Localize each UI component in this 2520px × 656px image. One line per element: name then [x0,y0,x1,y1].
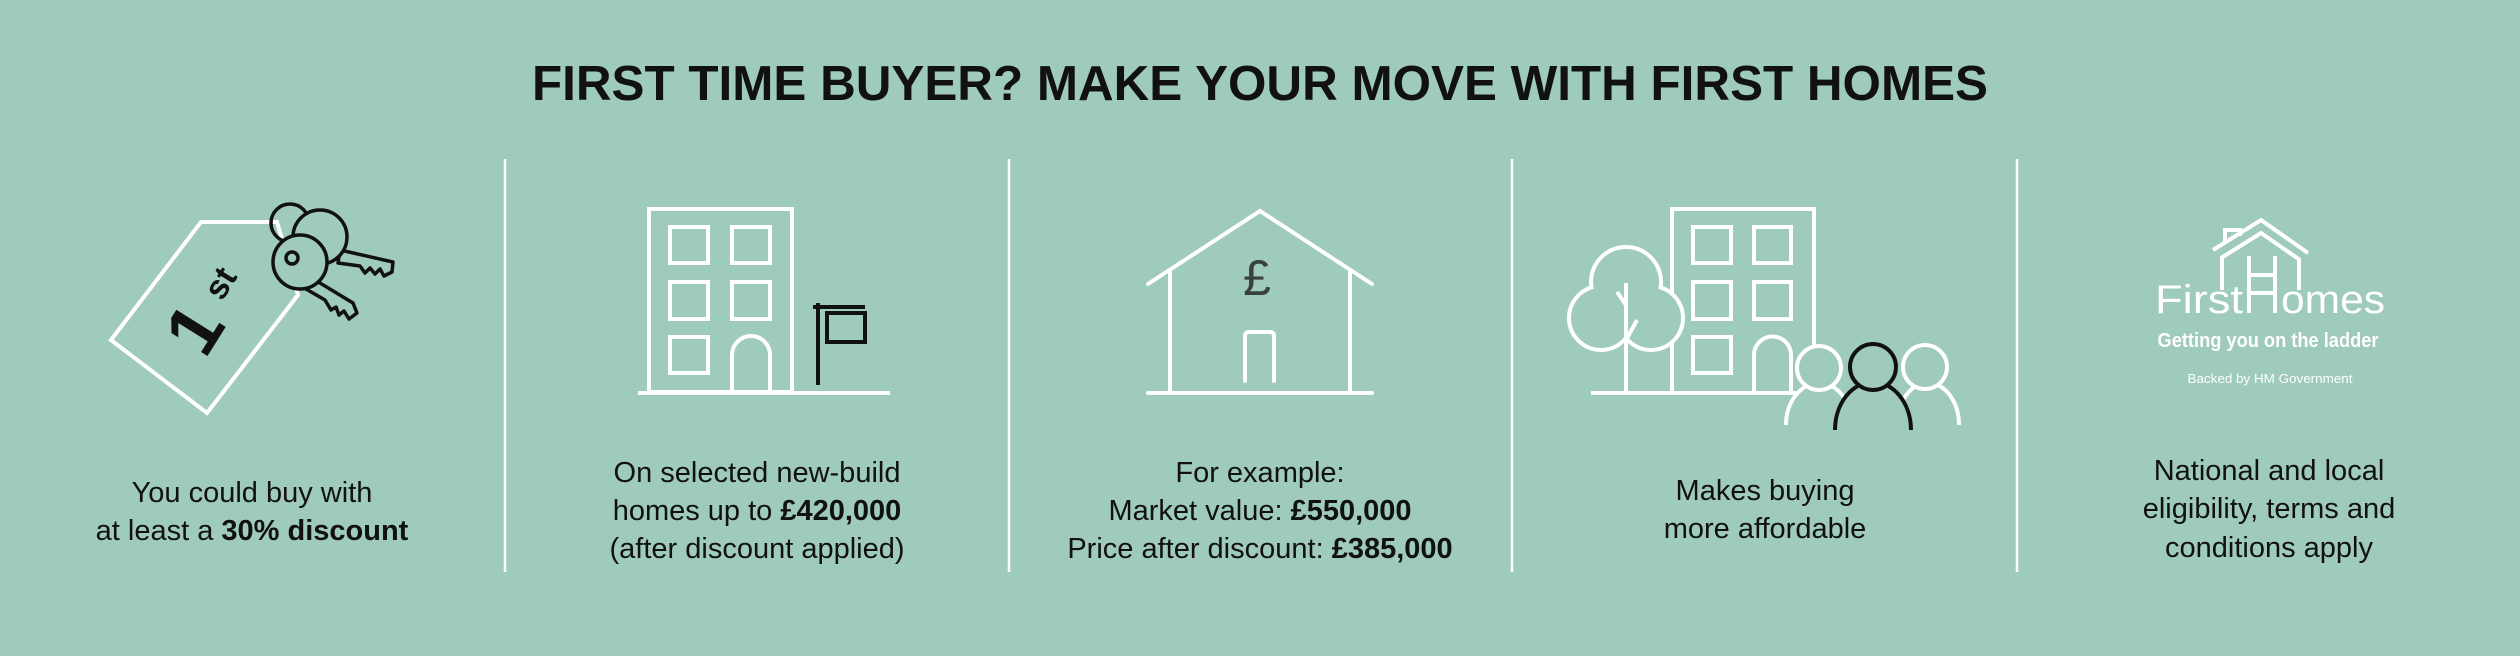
text: col4: Makes buying [1676,475,1854,507]
text: col1: You could buy with [132,477,372,509]
logo: First Homes: Backed by HM Government [2188,371,2353,386]
text: col5: conditions apply [2165,532,2373,564]
text: col4: more affordable [1664,513,1866,545]
icon: tag with keys: st [197,260,245,306]
icon: tag with keys [111,204,393,413]
text: col2: (after discount applied) [610,533,904,565]
icon: house with pound sign: £ [1243,250,1271,306]
text: col5: National and local [2154,455,2384,487]
text: col3: Price after discount: £385,000 [1067,533,1453,565]
logo: First Homes: First [2155,278,2243,322]
icon: house with pound sign [1148,211,1372,393]
text: col2: On selected new-build [614,457,900,489]
text: col3: Market value: £550,000 [1108,495,1412,527]
logo: First Homes [2155,220,2385,386]
text: col5: eligibility, terms and [2143,493,2395,525]
icon: apartment building with sign [638,209,890,393]
icon: tag with keys: 1 [148,290,240,368]
logo: First Homes: Getting you on the ladder [2158,330,2379,352]
text: col1 [96,477,409,547]
icon: building, tree and people [1571,209,1959,430]
text: col2 [610,457,904,565]
text: col4 [1664,475,1866,545]
text: col3: For example: [1175,457,1345,489]
text: col5 [2143,455,2395,564]
text: col1: at least a 30% discount [96,515,409,547]
logo: First Homes: omes [2281,278,2385,322]
title: FIRST TIME BUYER? MAKE YOUR MOVE WITH FIRST HOMES [532,57,1988,111]
text: col3 [1067,457,1453,565]
text: col2: homes up to £420,000 [613,495,901,527]
